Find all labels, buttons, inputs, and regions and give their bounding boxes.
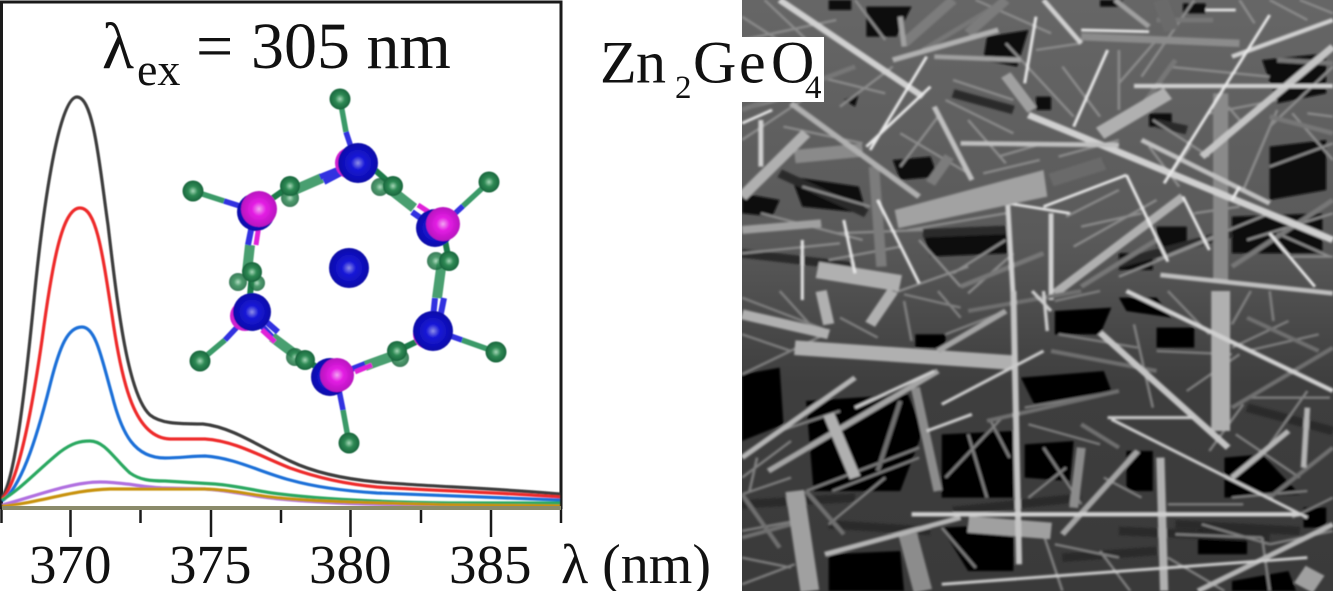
icon: hexagonal crystal ring structure — [182, 88, 506, 454]
spectra curves — [2, 97, 560, 507]
blue ring atoms — [233, 143, 453, 351]
curve: green spectrum — [2, 441, 560, 503]
panel: SEM micrograph of nanowires — [742, 0, 1333, 591]
x axis baseline — [2, 506, 561, 510]
curve: red spectrum — [2, 208, 560, 499]
plot frame and ticks — [2, 2, 561, 537]
curve: purple spectrum — [2, 482, 560, 507]
ring bonds — [247, 167, 449, 372]
inner oxygen atoms — [229, 176, 459, 370]
curve: gold spectrum — [2, 489, 560, 506]
outer oxygen atoms — [182, 88, 506, 454]
label: compound formula with white backing: 4 — [805, 70, 822, 106]
central blue atom — [329, 248, 369, 288]
panel: emission spectra plot — [2, 2, 711, 591]
blue atoms behind magenta — [237, 193, 454, 396]
title: excitation wavelength: 305 nm — [251, 10, 451, 83]
title: excitation wavelength: ex — [137, 44, 180, 95]
x axis tick labels — [29, 534, 532, 591]
label: compound formula with white backing: GeO — [693, 30, 814, 96]
label: compound formula with white backing: Zn — [600, 30, 666, 96]
title: excitation wavelength: = — [196, 10, 233, 83]
title: excitation wavelength: λ — [102, 10, 134, 83]
label: compound formula with white backing: 2 — [675, 70, 692, 106]
curve: blue spectrum — [2, 327, 560, 501]
magenta atoms behind blue — [230, 147, 443, 349]
label: compound formula with white backing — [600, 30, 824, 106]
curve: black spectrum — [2, 97, 560, 497]
magenta ring atoms — [241, 191, 460, 392]
outer bonds — [193, 99, 496, 443]
